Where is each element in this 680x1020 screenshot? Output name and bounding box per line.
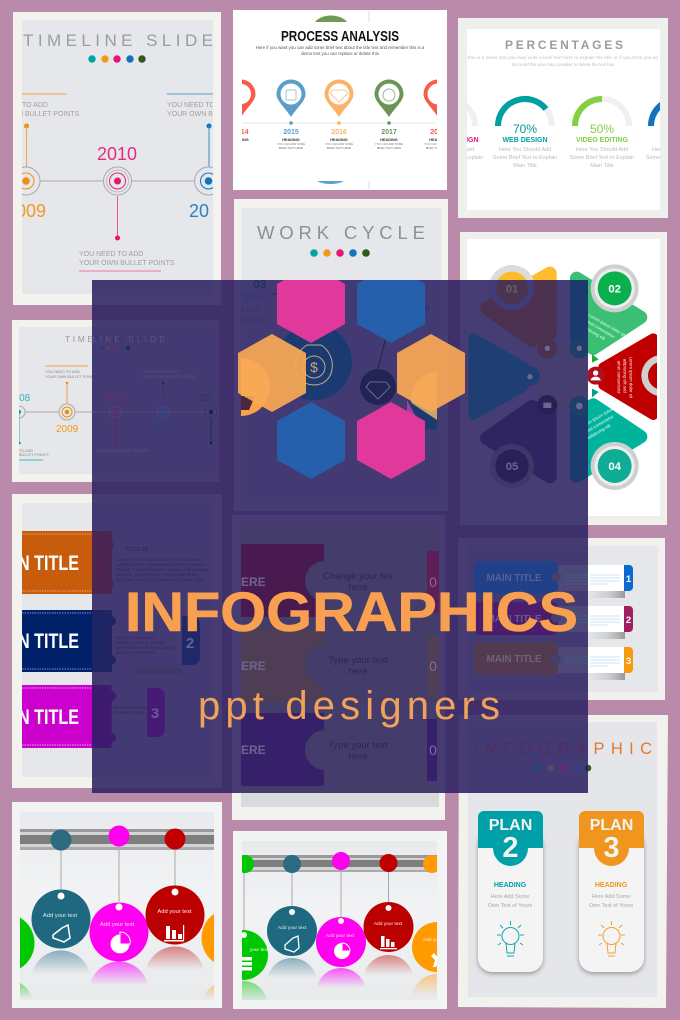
- gauge: web design 70%: Main Title: [513, 163, 537, 169]
- badge: 01: [490, 265, 534, 280]
- milestone 2010: 2010: [97, 144, 137, 164]
- ghost: stacked rows: ERE: [241, 575, 266, 589]
- ghost: stacked rows: 0: [429, 574, 437, 590]
- hexagon: pink top: [277, 265, 345, 343]
- gauge: web design 70%: [493, 99, 557, 169]
- pin 2016: YOU CAN ADD SOME: [325, 142, 353, 146]
- panel: timeline small: [8, 320, 219, 482]
- milestone 2010: YOU NEED TO ADD: [79, 251, 143, 258]
- pin 2018: [424, 80, 437, 149]
- gauge: video editing 50%: Some Brief Text to Explain: [570, 155, 634, 161]
- panel: work cycle: [234, 199, 448, 511]
- pin 2017: [374, 80, 404, 150]
- ghost: tab ends and text: amet, consectetur: [116, 635, 155, 641]
- milestone 2009: [22, 94, 79, 217]
- milestone small 2008: TO ADD: [19, 449, 33, 453]
- circle: green with database icon: [218, 855, 269, 980]
- gauge: video editing 50%: VIDEO EDITING: [576, 137, 629, 144]
- milestone small 2009: YOU NEED TO ADD: [45, 370, 80, 374]
- badge: 04: 04: [608, 461, 622, 473]
- plan 3 card: [579, 811, 644, 972]
- pin 2017: 2017: [381, 129, 397, 136]
- plan 3 card: PLAN: [590, 817, 633, 834]
- badge: 02: [591, 264, 639, 312]
- badge: 04: [591, 442, 639, 490]
- ghost: tab ends and text: sit amet commodo: [116, 650, 156, 656]
- ghost: cycle diagram: [443, 266, 641, 488]
- milestone 2011: [167, 94, 213, 217]
- panel: timeline slide: [6, 12, 235, 305]
- heading: timeline slide: TIMELINE SLIDE: [23, 31, 213, 50]
- circle: green with database icon: your text: [250, 947, 269, 953]
- petal: teal 04: amet consectetur: [583, 414, 615, 435]
- ghost: tab ends and text: ultricies, purus: [113, 710, 145, 716]
- ghost: stacked rows: Type your text: [328, 655, 388, 666]
- pin 2017: YOU CAN ADD SOME: [375, 142, 403, 146]
- panel: title tabs: [12, 494, 222, 788]
- petal: red 03: Lorem ipsum dolor sit: [628, 357, 633, 399]
- ghost: main title rows: MAIN TITLE: [486, 573, 542, 584]
- pin 2015: 2015: [283, 129, 299, 136]
- pin 2014: ING: [242, 138, 249, 142]
- rail: [20, 829, 214, 850]
- badge: 03: [641, 356, 657, 396]
- ghost: small timeline continuation: LINE SLIDE: [92, 334, 165, 344]
- pin 2015: HEADING: [282, 138, 300, 142]
- ghost: tab ends and text: ultricies, purus lectus malesuada libero,: [116, 572, 200, 578]
- petal: yellow 01: [532, 266, 557, 280]
- ghost: tab ends and text: 3: [151, 705, 159, 722]
- circle: red with chart icon: Add your text: [157, 909, 192, 915]
- plan 2 card: Here Add Some: [491, 894, 529, 900]
- reflections: [20, 947, 214, 1000]
- ghost: small timeline continuation: [92, 334, 219, 453]
- row 1: [555, 565, 633, 598]
- ghost: small timeline continuation: 2011: [153, 424, 175, 435]
- ghost: cycle labels: SHO: [418, 315, 435, 324]
- ghost: main title rows: MAIN TITLE: [486, 614, 542, 625]
- milestone small 2008: 2008: [8, 393, 31, 404]
- ghost: tab ends and text: adipiscing elit. Maecenas porttitor congue: [116, 562, 205, 568]
- ghost: tab ends and text: porttitor congue massa.: [116, 640, 166, 646]
- process description: [256, 45, 425, 56]
- ghost: small timeline continuation: YOUR OWN BULLET POINTS: [96, 449, 148, 453]
- gauge: video editing 50%: [570, 99, 634, 169]
- ghost: tab ends and text: sit amet commodo magna eros quis urna.: [116, 577, 204, 583]
- pin 2018: BRIEF TEXT HERE: [426, 146, 450, 150]
- plan 2 card: HEADING: [494, 882, 527, 889]
- ghost: small timeline continuation: YOUR OWN BULLET POINTS: [143, 375, 195, 379]
- milestone 2010: YOUR OWN BULLET POINTS: [79, 260, 175, 267]
- subheadline: ppt designers: [198, 684, 500, 728]
- circle: magenta with pie icon: [316, 852, 366, 967]
- circle: teal with hands icon: [267, 855, 317, 956]
- petal: green 02: Lorem ipsum dolor sit: [588, 313, 627, 338]
- colour dots: [88, 55, 146, 63]
- row 3: 3: [626, 656, 631, 667]
- tab: orange: [18, 531, 112, 594]
- gauge: video editing 50%: Main Title: [590, 163, 614, 169]
- milestone 2011: YOU NEED TO ADD: [167, 102, 231, 109]
- circle: red with chart icon: Add your text: [374, 921, 403, 927]
- ghost: infographic title: [474, 740, 652, 771]
- pin 2018: YOU CAN ADD SOME: [424, 142, 452, 146]
- plan 3 card: Here Add Some: [592, 894, 630, 900]
- panel: process analysis: [226, 10, 452, 190]
- circle: teal with hands icon: [32, 830, 90, 948]
- gauge: graphic design: GRAPHIC DESIGN: [417, 137, 479, 144]
- gauge: graphic design: Some Brief Text to Explain: [419, 155, 483, 161]
- pin 2016: BRIEF TEXT HERE: [327, 146, 351, 150]
- process description: Here if you want you can add some brief text about the title text and remember this is a: [256, 45, 425, 50]
- heading: work cycle: WORK CYCLE: [257, 222, 425, 243]
- ghost: stacked rows: ERE: [241, 743, 266, 757]
- plan 3 card: Own Text of Yours: [589, 903, 633, 909]
- percentages description: this is a demo text you may write a brief text here to explain the title or if you think you do: [468, 55, 659, 60]
- ghost content beneath overlay: [92, 266, 652, 793]
- row 2: 2: [626, 615, 631, 626]
- ghost: cycle diagram: 01: [506, 284, 518, 296]
- ghost: money circle: $: [310, 359, 318, 375]
- pin 2018: 2018: [430, 129, 446, 136]
- heading: infographic: INFOGRAPHIC: [474, 740, 652, 758]
- ghost: diamond circle: [360, 369, 396, 405]
- hexagon: blue bottom: [277, 402, 345, 479]
- gauge: web design 70%: Here You Should Add: [499, 147, 551, 153]
- milestone small 2008: [19, 394, 48, 461]
- ghost: stacked rows: here: [348, 751, 368, 762]
- milestone 2011: YOUR OWN BULLET: [167, 111, 235, 118]
- panel: main title rows: [458, 538, 665, 700]
- row 1: 1: [626, 574, 632, 585]
- ghost: tab ends and text: Lorem ipsum dolor sit amet, consectetur: [116, 557, 202, 563]
- ghost: tab ends and text: sed pulvinar ultricies, purus: [116, 645, 175, 651]
- gauge: graphic design: [467, 103, 483, 160]
- gauge: video editing 50%: Here You Should Add: [576, 147, 628, 153]
- plan 2 card: [478, 811, 543, 972]
- circle: orange with figure icon: [412, 855, 462, 972]
- ghost: stacked rows: Type your text: [328, 740, 388, 751]
- pin 2017: HEADING: [380, 138, 398, 142]
- ghost: main title rows: [474, 561, 590, 675]
- ghost: stacked rows: [241, 525, 439, 793]
- circle: red with chart icon: [146, 828, 204, 944]
- petal: red 03: [603, 338, 653, 415]
- circle: teal with hands icon: Add your text: [43, 913, 77, 919]
- petal: teal 04: Lorem ipsum dolor sit: [580, 404, 619, 429]
- petal: green 02: amet consectetur: [584, 318, 616, 339]
- ghost: cycle labels: 04: [417, 300, 431, 314]
- petal: teal 04: [577, 404, 641, 476]
- circle: teal with hands icon: Add your text: [278, 925, 307, 931]
- plan 2 card: Own Text of Yours: [488, 903, 532, 909]
- panel: plans: [458, 715, 668, 1008]
- colour dots: [310, 249, 370, 257]
- ghost: small timeline continuation: 2010: [105, 393, 128, 404]
- petal: green 02: adipiscing elit: [581, 324, 607, 342]
- ghost: small timeline continuation: 20: [200, 393, 212, 404]
- heading: percentages: PERCENTAGES: [505, 38, 623, 52]
- row 3: [555, 647, 633, 680]
- milestone 2009: N BULLET POINTS: [18, 111, 80, 118]
- circle: green: [20, 918, 34, 968]
- pin 2016: [324, 80, 354, 150]
- panel: percentages: [458, 18, 668, 218]
- milestone 2011: 20: [189, 201, 209, 221]
- ghost: small timeline continuation: YOU NEED TO ADD: [143, 370, 178, 374]
- ghost: stacked rows: 0: [429, 742, 437, 758]
- hexagon: orange right: [397, 334, 465, 412]
- pin 2015: BRIEF TEXT HERE: [279, 146, 303, 150]
- badge: 02: 02: [608, 283, 621, 295]
- milestone 2009: TO ADD: [22, 102, 48, 109]
- petal: green 02: [577, 278, 641, 348]
- ghost: cycle labels: [241, 277, 435, 369]
- petal: red 03: amet consectetur: [616, 361, 621, 394]
- ghost: tab ends and text: porttitor congue massa.: [113, 705, 163, 711]
- ghost: stacked rows: 0: [429, 658, 437, 674]
- gauge: partial blue: [646, 102, 660, 159]
- ghost: stacked rows: here: [348, 666, 368, 677]
- hexagon: blue top: [357, 265, 425, 343]
- ghost: tab ends and text: 2: [186, 635, 194, 652]
- ghost: tab ends and text: [92, 531, 209, 748]
- heading: process analysis: PROCESS ANALYSIS: [281, 29, 399, 45]
- ghost: stacked rows: Change your tex: [323, 571, 393, 582]
- tab: navy: [18, 610, 112, 672]
- milestone 2009: 2009: [6, 201, 46, 221]
- dot under overlay edge: [585, 765, 591, 771]
- ghost: cycle diagram: 05: [506, 461, 518, 473]
- panel: cycle diagram: [460, 232, 680, 525]
- gauge: video editing 50%: 50%: [590, 122, 614, 136]
- ghost: cycle labels: 03: [253, 277, 267, 291]
- hub node: person: [587, 354, 605, 397]
- ghost: tab ends and text: massa. Fusce posuere, magna sed pulvinar: [116, 567, 209, 573]
- plan 2 card: 2: [502, 832, 519, 864]
- milestone small 2009: 2009: [56, 424, 79, 435]
- circle: orange: [202, 914, 214, 962]
- ghost: orange and pink side circles: [241, 358, 437, 430]
- petal: teal 04: adipiscing elit: [586, 422, 612, 440]
- pin 2016: 2016: [331, 129, 347, 136]
- headline: INFOGRAPHICS: [125, 580, 578, 643]
- hexagon: pink bottom: [357, 402, 425, 479]
- plan 3 card: 3: [603, 832, 620, 864]
- pin 2014: [242, 80, 256, 141]
- milestone small 2009: [45, 366, 97, 435]
- ghost: money circle: [276, 324, 352, 400]
- percentages description: not need this you may consider to delete the text box: [512, 62, 615, 67]
- tab: magenta: [18, 685, 112, 748]
- plan 2 card: PLAN: [489, 817, 532, 834]
- hexagons: [238, 265, 465, 479]
- circle: orange with figure icon: Add your: [423, 937, 443, 943]
- pin 2017: BRIEF TEXT HERE: [377, 146, 401, 150]
- ghost: cycle labels: TPING: [241, 293, 265, 302]
- pin 2018: HEADING: [429, 138, 447, 142]
- gauge: web design 70%: 70%: [513, 122, 537, 136]
- ghost: stacked rows: ERE: [241, 659, 266, 673]
- dark overlay panel: [92, 280, 588, 793]
- gauge: graphic design: Here You Should Add: [422, 147, 474, 153]
- process description: demo text you can replace or delete this: [301, 51, 380, 56]
- hexagon: orange left: [238, 334, 306, 412]
- ghost: stacked rows: here: [348, 582, 368, 593]
- ghost: cycle labels: Explain: [241, 317, 263, 324]
- heading: small timeline: TIMELINE SLIDE: [65, 334, 165, 344]
- circle: red with chart icon: [364, 854, 414, 952]
- icon: teal bulb: [497, 921, 524, 956]
- icon: orange bulb: [598, 921, 625, 956]
- panel: hanging circles large: [12, 802, 222, 1008]
- circle: magenta with pie icon: Add your text: [100, 922, 134, 928]
- circle: magenta with pie icon: Add your text: [326, 933, 355, 939]
- ghost: main title rows: MAIN TITLE: [486, 654, 542, 665]
- panel: stacked rows: [232, 515, 445, 820]
- circle: magenta with pie icon: [90, 826, 148, 962]
- plan 3 card: HEADING: [595, 882, 628, 889]
- ghost: cycle labels: e Brief: [241, 307, 260, 314]
- tab: magenta: N TITLE: [18, 706, 79, 729]
- percentages description: [468, 55, 659, 67]
- milestone small 2009: YOUR OWN BULLET POINTS: [45, 375, 97, 379]
- ghost: infographic title: INFOGRAPHIC: [474, 740, 652, 758]
- milestone small 2008: BULLET POINTS: [19, 453, 49, 457]
- rail: [242, 855, 437, 872]
- pin 2015: [276, 80, 306, 150]
- panel: hanging circles small: [218, 831, 462, 1009]
- pin 2015: YOU CAN ADD SOME: [277, 142, 305, 146]
- tab: orange: N TITLE: [18, 552, 79, 575]
- pin 2014: 2014: [233, 129, 249, 136]
- petal: red 03: adipiscing elit sed: [622, 359, 627, 393]
- milestone 2010: [79, 144, 175, 271]
- reflections: [218, 955, 462, 1006]
- pin 2016: HEADING: [330, 138, 348, 142]
- tab: navy: N TITLE: [18, 630, 79, 653]
- gauge: web design 70%: WEB DESIGN: [502, 137, 548, 144]
- gauge: web design 70%: Some Brief Text to Explain: [493, 155, 557, 161]
- ghost: tab ends and text: TITLE 01: [125, 547, 148, 553]
- row 2: [555, 606, 633, 639]
